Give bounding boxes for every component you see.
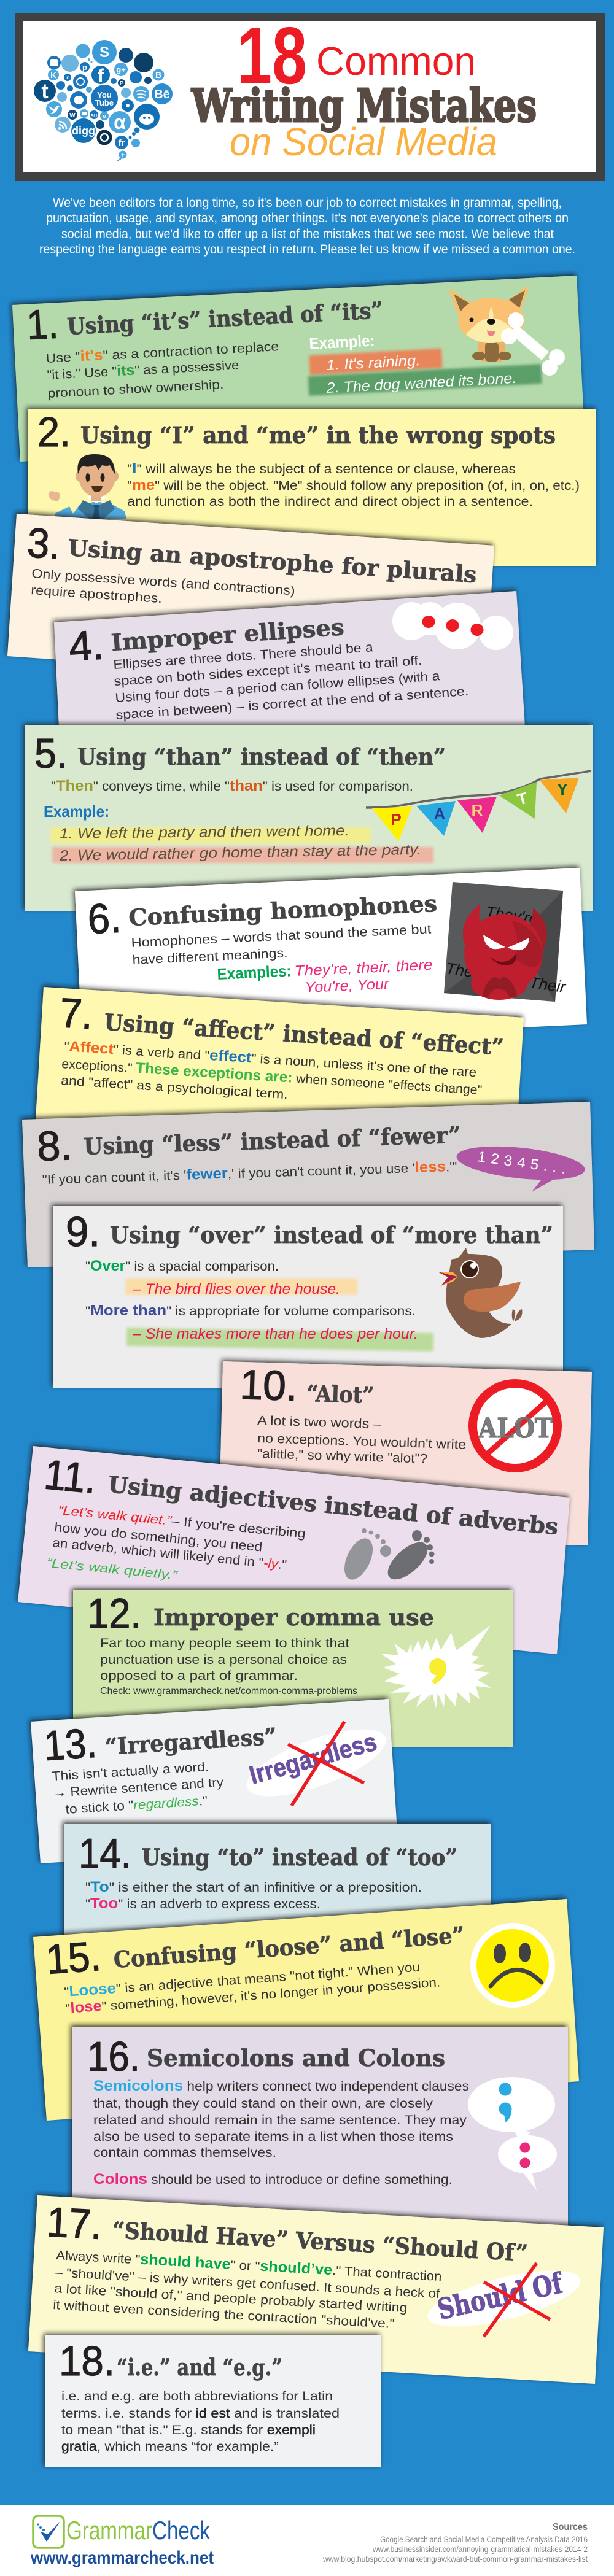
social media icon cloud: fr: [119, 138, 125, 149]
example 2 with brush highlight: [308, 364, 542, 396]
body text 1: pronoun to show ownership.: [47, 377, 224, 401]
title: 18 Common: 18: [237, 10, 307, 101]
panel: mistake 6: [75, 868, 587, 1048]
body text 8: "If you can count it, it's ' fewer,' if you can't count it, you use ' less.'": [42, 1158, 457, 1188]
body text 13: → Rewrite sentence and try: [52, 1775, 224, 1800]
number 6: 6.: [87, 895, 122, 943]
icon: devil card: They're: [484, 902, 539, 928]
heading 2: Using “I” and “me” in the wrong spots: [80, 422, 556, 449]
number 12: 12.: [87, 1590, 141, 1637]
example: more than: [126, 1326, 433, 1352]
body text 17: – "should've" – is why writers get confused. It sounds a heck of: [55, 2265, 440, 2301]
number 8: 8.: [36, 1122, 72, 1170]
social media icon cloud: B: [155, 70, 161, 80]
heading 1: Using “it’s” instead of “its”: [66, 296, 384, 340]
number 3: 3.: [26, 519, 62, 568]
body text 11: an adverb, which will likely end in " -ly.": [52, 1536, 287, 1572]
body text 4: space on both sides except it's meant to trail off.: [114, 654, 422, 689]
social media icon cloud: in: [65, 75, 70, 80]
icon: devil card: [444, 882, 567, 1002]
body text 11: “Let’s walk quiet.” – If you're describing: [58, 1503, 306, 1541]
icon: party bunting: P: [391, 810, 402, 829]
body text 16: Semicolons help writers connect two independent clauses: [93, 2078, 469, 2094]
panel: mistake 2: [28, 409, 596, 566]
body text 14: "To" is either the start of an infinitive or a preposition.: [85, 1879, 422, 1895]
intro paragraph: social media, but we'd like to offer up a list of the mistakes that we see most. We believe that: [61, 227, 554, 241]
icon: crossed out Irregardless: [239, 1715, 394, 1810]
icon: dog with bone: [449, 285, 565, 376]
body text 7: and "affect" as a psychological term.: [61, 1073, 288, 1102]
panel: mistake 10: [219, 1361, 592, 1545]
footer: [0, 2505, 614, 2576]
body text 12: Far too many people seem to think that: [100, 1636, 349, 1650]
body text 12: [100, 1636, 357, 1696]
icon: crossed out Irregardless: Irregardless: [246, 1727, 380, 1790]
body text 5: "Then" conveys time, while " than" is used for comparison.: [51, 778, 413, 794]
examples: [217, 957, 433, 996]
number 1: 1.: [26, 300, 60, 349]
panel: mistake 17: [28, 2195, 604, 2384]
body text 18: terms. i.e. stands for id est and is translated: [61, 2407, 340, 2421]
example 1 with brush highlight: [309, 349, 443, 375]
number 13: 13.: [42, 1720, 98, 1770]
social media icon cloud: P: [120, 80, 124, 87]
logo: GrammarCheck: GrammarCheck: [66, 2516, 211, 2545]
body text 12: punctuation use is a personal choice as: [100, 1653, 347, 1667]
example heading: Example:: [309, 331, 375, 353]
sources: [322, 2522, 588, 2564]
panel: mistake 14: [64, 1824, 491, 1940]
body text 11: how you do something, you need: [54, 1520, 263, 1555]
body text 14: [85, 1879, 422, 1912]
icon: party bunting: Y: [557, 780, 568, 799]
body text 7: "Affect" is a verb and " effect" is a noun, unless it's one of the rare: [64, 1038, 477, 1080]
intro paragraph: We've been editors for a long time, so it's been our job to correct mistakes in grammar, spelling,: [53, 196, 562, 210]
panel: mistake 18: [45, 2335, 381, 2467]
heading 15: Confusing “loose” and “lose”: [112, 1921, 465, 1973]
body text 4: Using four dots – a period can follow ellipses (with a: [115, 669, 440, 705]
heading 8: Using “less” instead of “fewer”: [84, 1121, 461, 1160]
social media icon cloud: [34, 40, 173, 161]
body text 17: it without even considering the contraction "should've.": [53, 2298, 395, 2331]
body text 10: no exceptions. You wouldn't write: [257, 1431, 466, 1452]
body text 16: Colons should be used to introduce or define something.: [93, 2171, 453, 2187]
icon: semicolon and colon bubbles: [468, 2077, 557, 2191]
body text 3: Only possessive words (and contractions): [31, 567, 295, 598]
body text 17: a lot like "should of," and people probably started writing: [54, 2281, 408, 2315]
panel: mistake 15: [33, 1899, 579, 2121]
panel: mistake 9: [53, 1206, 563, 1388]
heading 3: Using an apostrophe for plurals: [67, 534, 478, 588]
icon: crossed out Should Of: Should Of: [435, 2266, 567, 2326]
icon: sad face: [470, 1923, 555, 2008]
heading 12: Improper comma use: [154, 1604, 434, 1631]
panel: mistake 3: [7, 514, 494, 688]
body text: over: "Over" is a spacial comparison.: [85, 1258, 279, 1274]
number 18: 18.: [59, 2338, 115, 2385]
example 1 with brush highlight: 1. It's raining.: [326, 352, 421, 374]
panel: mistake 12: [73, 1590, 513, 1747]
number 17: 17.: [45, 2199, 103, 2248]
heading 16: Semicolons and Colons: [147, 2044, 445, 2071]
body text 1: "it is." Use "its" as a possessive: [47, 357, 239, 383]
number 9: 9.: [66, 1209, 100, 1255]
body text 16: contain commas themselves.: [93, 2146, 276, 2160]
title: on Social Media: on Social Media: [230, 120, 497, 164]
icon: bird: [438, 1248, 522, 1338]
icon: ellipsis cloud: [392, 602, 513, 650]
body text 10: "alittle," so why write "alot"?: [257, 1447, 427, 1466]
icon: party bunting: [366, 771, 591, 841]
icon: no alot sign: ALOT: [478, 1413, 553, 1444]
icon: party bunting: A: [434, 805, 446, 823]
social media icon cloud: S: [99, 44, 109, 61]
title: 18 Common: [237, 10, 476, 101]
body text 15: "lose" something, however, it's no longer in your possession.: [64, 1973, 441, 2017]
heading 14: Using “to” instead of “too”: [142, 1844, 457, 1871]
number 4: 4.: [68, 621, 105, 670]
body text 2: "me" will be the object. "Me" should follow any preposition (of, in, on, etc.): [127, 477, 580, 493]
body text: more than: "More than " is appropriate for volume comparisons.: [85, 1302, 416, 1319]
social media icon cloud: K: [50, 71, 56, 80]
social media icon cloud: digg: [72, 125, 95, 137]
panel: mistake 1: [12, 276, 585, 462]
example 2 with brush highlight: 2. We would rather go home than stay at the party.: [59, 841, 421, 864]
panel: mistake 11: [18, 1446, 570, 1654]
social media icon cloud: t: [41, 80, 49, 103]
heading 11: Using adjectives instead of adverbs: [107, 1471, 559, 1540]
intro paragraph: [39, 196, 575, 257]
body text 4: [113, 640, 469, 722]
social media icon cloud: p: [82, 63, 87, 72]
title: 18 Common: Common: [316, 39, 476, 83]
heading 13: “Irregardless”: [104, 1722, 278, 1760]
website url: www.grammarcheck.net: [30, 2548, 214, 2568]
heading 9: Using “over” instead of “more than”: [110, 1221, 553, 1248]
body text 2: "I" will always be the subject of a sentence or clause, whereas: [127, 460, 516, 477]
social media icon cloud: +: [121, 152, 125, 159]
social media icon cloud: f: [98, 66, 104, 86]
body text 4: Ellipses are three dots. There should be a: [113, 640, 374, 672]
body text 16: related and should remain in the same sentence. They may: [93, 2113, 467, 2127]
body text 18: i.e. and e.g. are both abbreviations for Latin: [61, 2389, 333, 2404]
logo: GrammarCheck: [33, 2516, 211, 2548]
example: over: – The bird flies over the house.: [132, 1281, 340, 1298]
icon: party bunting: R: [472, 801, 483, 819]
heading 10: “Alot”: [306, 1380, 375, 1409]
heading 4: Improper ellipses: [111, 613, 345, 656]
body text 16: [93, 2078, 469, 2187]
icon: devil card: There: [445, 959, 489, 983]
body text 18: gratia, which means “for example.”: [61, 2440, 279, 2454]
panel: mistake 8: [22, 1102, 594, 1267]
body text 3: [31, 567, 295, 606]
number 11: 11.: [42, 1451, 98, 1503]
body text 12: opposed to a part of grammar.: [100, 1669, 298, 1683]
body text 6: Homophones – words that sound the same but: [131, 922, 432, 950]
social media icon cloud: Bē: [154, 88, 170, 101]
example: more than: – She makes more than he does per hour.: [132, 1326, 418, 1342]
number 10: 10.: [239, 1361, 298, 1410]
icon: speech bubble 12345: [455, 1141, 586, 1192]
body text 13: [52, 1760, 224, 1817]
body text 2: [127, 460, 580, 509]
panel: mistake 7: [35, 987, 524, 1129]
examples: They're, their, there: [294, 957, 433, 980]
number 15: 15.: [45, 1933, 103, 1983]
social media icon cloud: W: [69, 112, 76, 119]
body text 17: Always write "should have " or "should’ve." That contraction: [56, 2246, 442, 2284]
body text 6: [131, 922, 432, 967]
heading 6: Confusing homophones: [128, 890, 438, 931]
icon: speech bubble 12345: 1 2 3 4 5 . . .: [476, 1148, 567, 1177]
social media icon cloud: v: [103, 114, 106, 120]
body text 18: to mean "that is." E.g. stands for exempli: [61, 2423, 316, 2437]
body text 11: [46, 1503, 306, 1583]
heading 5: Using “than” instead of “then”: [77, 743, 446, 770]
body text 11: “Let’s walk quietly.”: [46, 1556, 179, 1583]
icon: party bunting: T: [515, 789, 529, 809]
header banner: [15, 10, 605, 181]
body text 2: and function as both the indirect and direct object in a sentence.: [127, 495, 533, 509]
icon: no alot sign: [473, 1383, 558, 1468]
heading 17: “Should Have” Versus “Should Of”: [111, 2216, 529, 2267]
body text 15: "Loose" is an adjective that means "not tight." When you: [63, 1959, 421, 2000]
body text 3: require apostrophes.: [31, 583, 163, 606]
examples: Examples:: [217, 961, 292, 983]
example heading: Example:: [44, 802, 109, 821]
number 5: 5.: [34, 730, 68, 777]
icon: devil card: Their: [528, 973, 567, 996]
body text 13: to stick to " regardless .": [65, 1793, 208, 1817]
body text 12: Check: www.grammarcheck.net/common-comma-problems: [100, 1686, 357, 1696]
social media icon cloud: su: [91, 112, 97, 118]
number 14: 14.: [79, 1830, 131, 1877]
body text 1: [45, 338, 279, 401]
body text 17: [53, 2246, 442, 2331]
icon: man in suit: [49, 454, 126, 519]
body text 18: [61, 2389, 340, 2454]
number 7: 7.: [58, 989, 95, 1038]
social media icon cloud: α: [114, 111, 126, 133]
body text 16: that, though they could stand on their own, are closely: [93, 2097, 433, 2111]
example 2 with brush highlight: 2. The dog wanted its bone.: [325, 370, 517, 396]
panel: mistake 13: [31, 1699, 398, 1863]
body text 16: also be used to separate items in a list when those items: [93, 2130, 453, 2144]
panel: mistake 5: [25, 725, 593, 911]
social media icon cloud: You: [97, 90, 112, 99]
icon: footprints: [339, 1528, 435, 1586]
example 1 with brush highlight: 1. We left the party and then went home.: [60, 822, 349, 842]
body text 14: "Too" is an adverb to express excess.: [85, 1895, 321, 1912]
body text 1: Use "it's" as a contraction to replace: [45, 338, 279, 366]
heading 7: Using “affect” instead of “effect”: [103, 1008, 505, 1061]
heading 18: “i.e.” and “e.g.”: [117, 2354, 282, 2381]
body text 7: exceptions." These exceptions are: when someone "effects change": [61, 1055, 483, 1098]
social media icon cloud: Tube: [95, 98, 114, 107]
body text 6: have different meanings.: [132, 946, 288, 967]
intro paragraph: respecting the language earns you respect in return. Please let us know if we missed a common one.: [39, 242, 575, 257]
intro paragraph: punctuation, usage, and syntax, among other things. It's not everyone's place to correct others on: [46, 211, 569, 225]
panel: mistake 4: [54, 591, 526, 767]
body text 4: space in between) – is correct at the end of a sentence.: [115, 684, 469, 722]
body text 13: This isn't actually a word.: [52, 1760, 209, 1784]
body text 10: A lot is two words –: [257, 1414, 382, 1431]
body text 7: [61, 1038, 483, 1102]
icon: comma starburst: [381, 1625, 491, 1708]
examples: You're, Your: [305, 976, 390, 996]
sources: Sources: [553, 2522, 588, 2532]
body text 15: [63, 1959, 441, 2017]
number 2: 2.: [37, 409, 71, 455]
number 16: 16.: [87, 2033, 140, 2080]
social media icon cloud: g+: [116, 65, 126, 74]
body text 10: [257, 1414, 466, 1466]
panel: mistake 16: [72, 2027, 568, 2234]
